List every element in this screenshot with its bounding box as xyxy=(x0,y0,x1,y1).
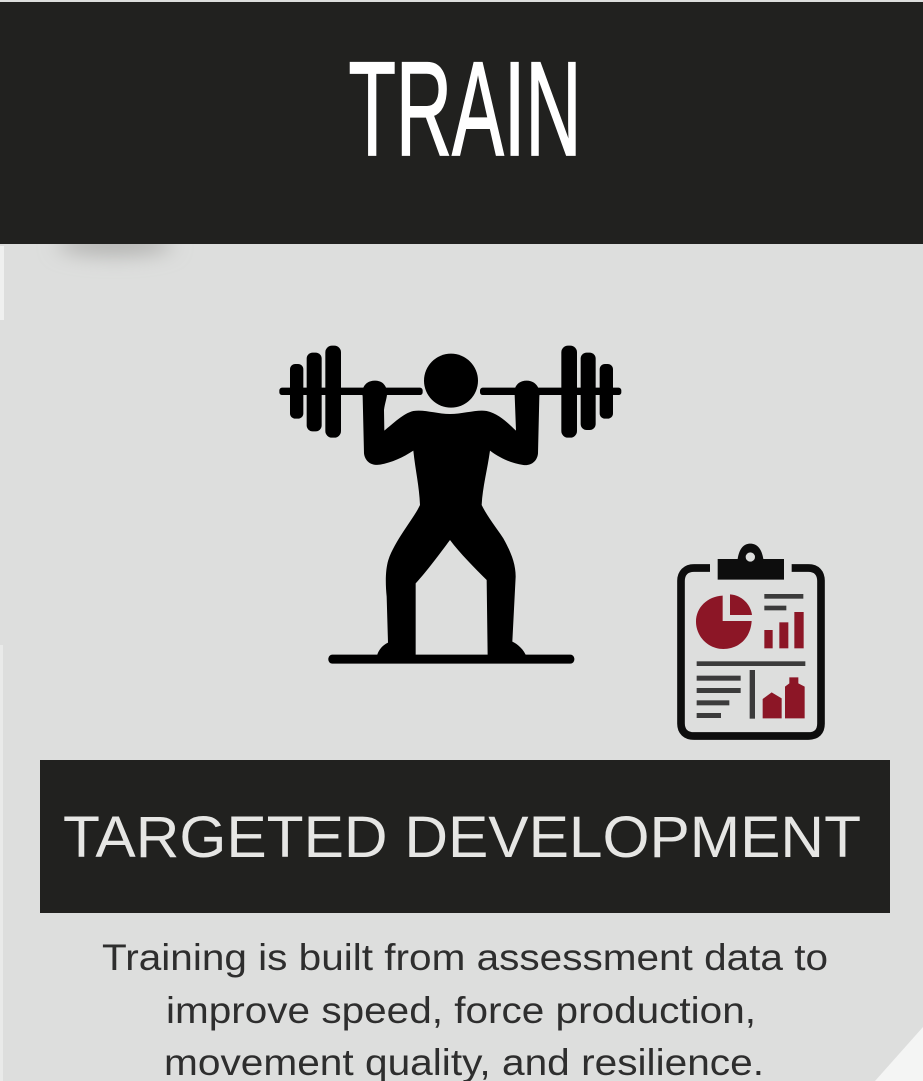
head xyxy=(424,354,478,408)
description text: improve speed, force production, xyxy=(166,990,756,1031)
body xyxy=(362,381,540,657)
subtitle: TARGETED DEVELOPMENT xyxy=(63,805,861,870)
pie chart xyxy=(696,594,752,649)
text lines xyxy=(697,594,805,719)
icon: weightlifter xyxy=(279,346,621,664)
barbell xyxy=(279,346,621,438)
title: TRAIN xyxy=(348,35,582,184)
header band xyxy=(0,2,923,244)
clip xyxy=(718,544,784,580)
description text xyxy=(102,937,828,1081)
icon: clipboard with charts xyxy=(681,544,821,736)
lower bar chart xyxy=(763,677,805,718)
small bar chart xyxy=(764,612,804,648)
clipboard outline xyxy=(681,568,821,736)
description text: Training is built from assessment data to xyxy=(102,937,828,978)
ground line xyxy=(328,655,574,664)
subtitle band xyxy=(40,760,890,913)
